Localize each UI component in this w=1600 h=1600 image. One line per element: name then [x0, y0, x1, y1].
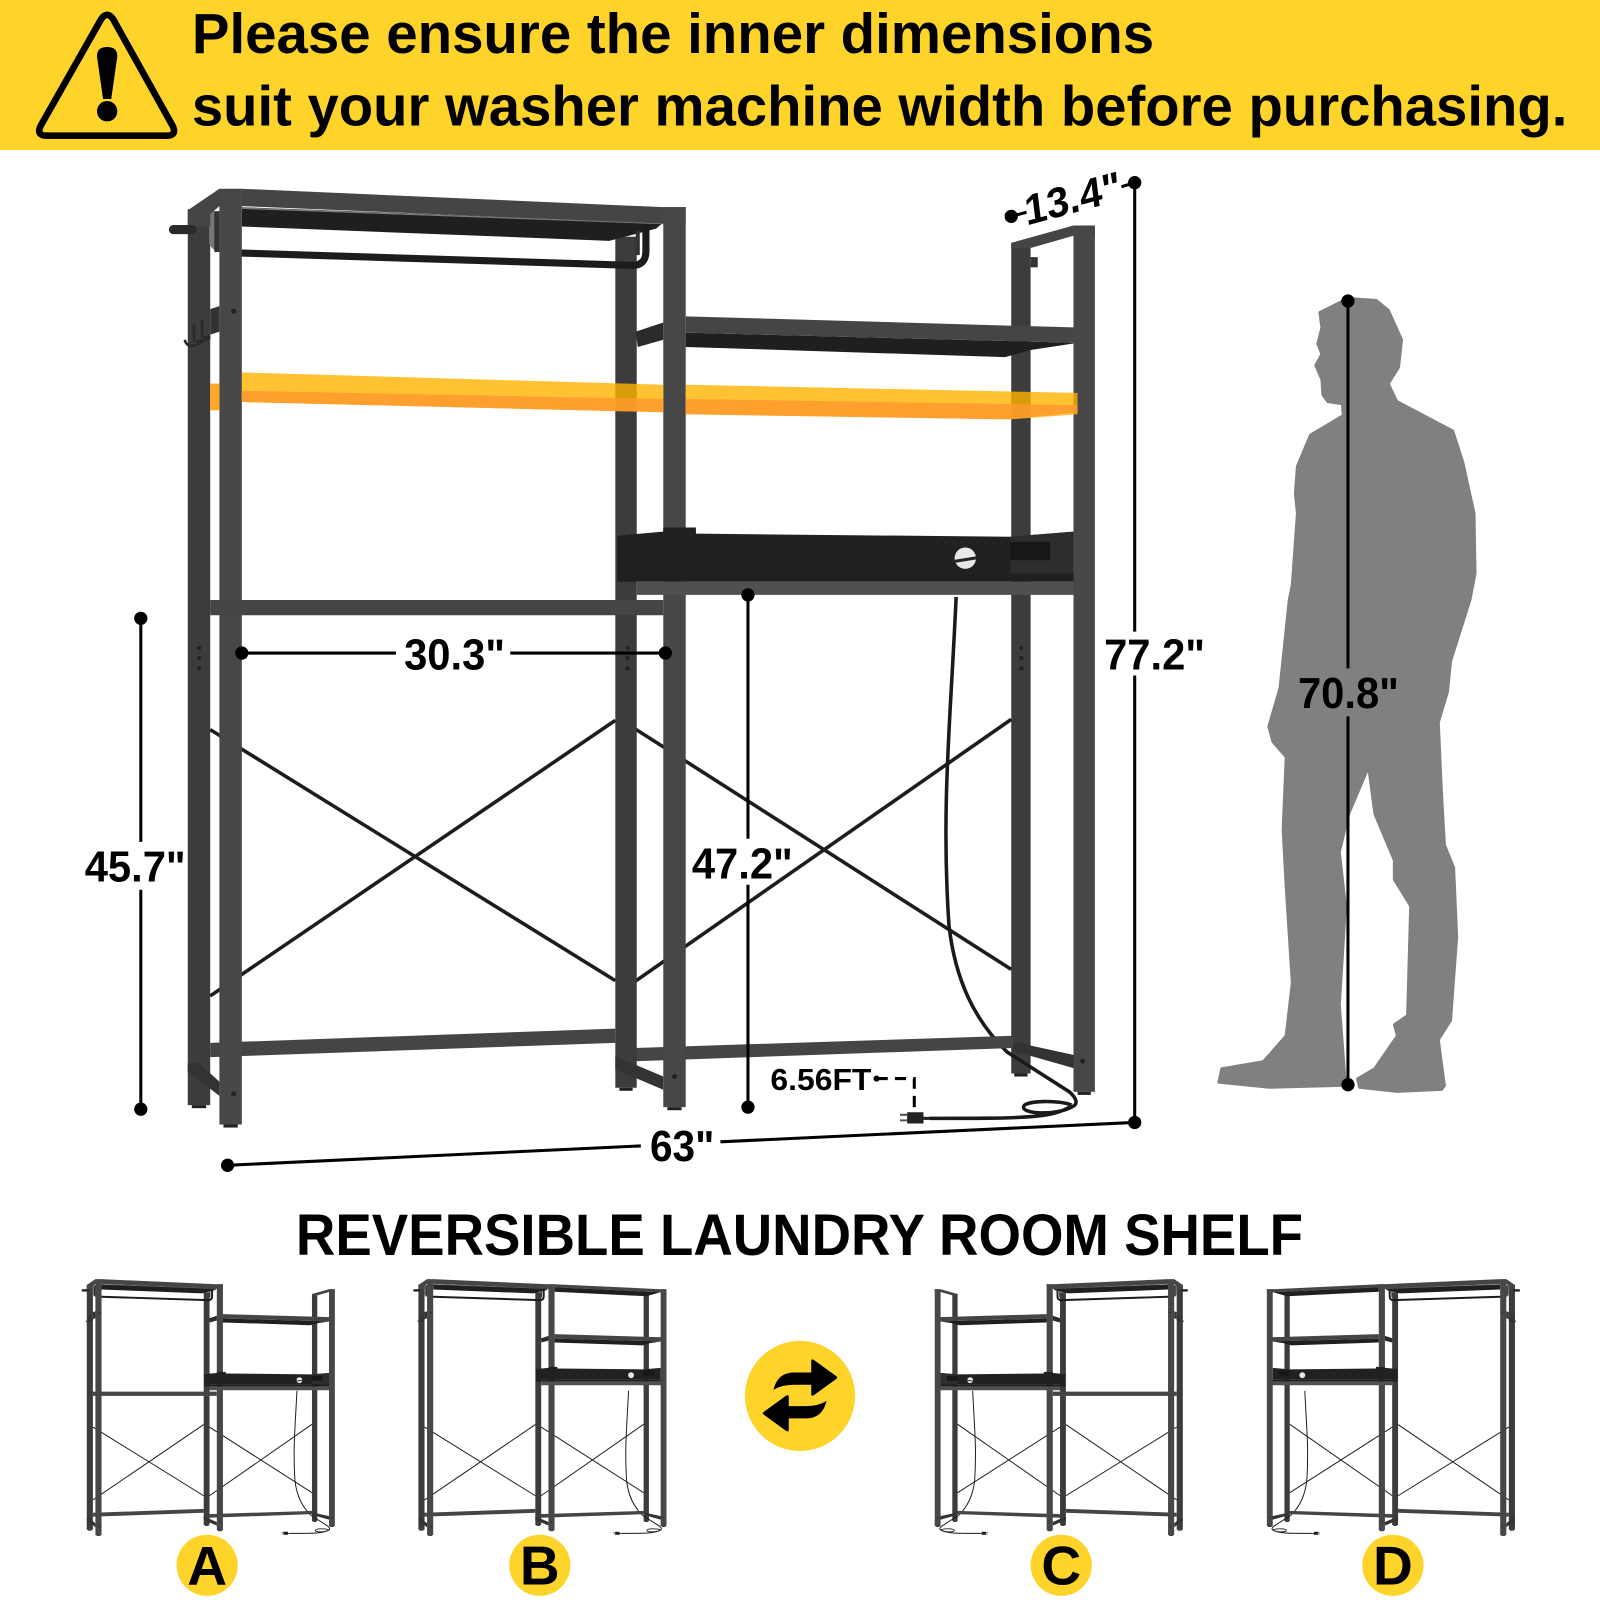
label C [1031, 1535, 1092, 1597]
configuration D [1267, 1279, 1519, 1536]
dimension: 70.8 person height: 70.8" [1298, 669, 1399, 718]
dimension: 77.2 height: 77.2" [1104, 630, 1205, 679]
orange LED glow shelves [210, 372, 1078, 419]
dimension: 70.8 person height [1298, 294, 1399, 1091]
dimension: 30.3 inner width: 30.3" [404, 630, 505, 679]
configuration C [935, 1279, 1187, 1536]
product: laundry room shelf [173, 189, 1095, 1128]
dimension: 30.3 inner width [235, 630, 672, 679]
icon: warning triangle [39, 15, 174, 136]
dimension: 63 total width [221, 1122, 1135, 1172]
heading: reversible laundry room shelf: REVERSIBLE LAUNDRY ROOM SHELF [296, 1203, 1303, 1268]
label D: D [1373, 1535, 1413, 1597]
dimension: 77.2 height [1104, 176, 1205, 1129]
banner text line 1: Please ensure the inner dimensions [192, 2, 1154, 65]
cord length label [770, 1063, 914, 1110]
label A: A [187, 1535, 227, 1597]
configuration B [414, 1279, 666, 1536]
label D [1362, 1535, 1423, 1597]
warning banner [0, 0, 1600, 150]
configuration A [83, 1279, 335, 1536]
dimension: 13.4 depth: 13.4" [1022, 162, 1123, 234]
label B: B [520, 1535, 560, 1597]
dimension: 47.2 height [692, 588, 793, 1114]
cord length label: 6.56FT [770, 1063, 872, 1097]
label B [509, 1535, 570, 1597]
label C: C [1041, 1535, 1081, 1597]
icon: swap arrows [745, 1341, 855, 1451]
label A [177, 1535, 238, 1597]
dimension: 47.2 height: 47.2" [692, 840, 793, 889]
person silhouette [1218, 294, 1476, 1092]
dimension: 45.7 height: 45.7" [85, 843, 186, 892]
dimension: 63 total width: 63" [650, 1122, 714, 1171]
dimension: 45.7 height [85, 612, 186, 1116]
banner text line 2: suit your washer machine width before purchasing. [192, 75, 1567, 138]
